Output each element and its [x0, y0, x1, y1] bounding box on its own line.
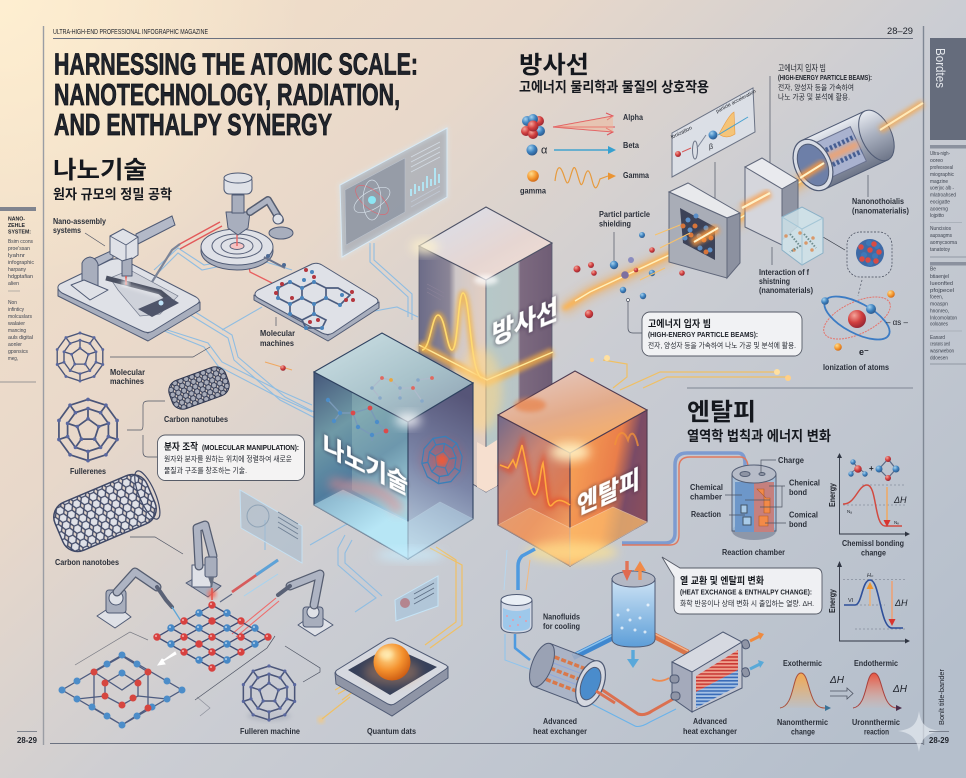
chart: enthalpy energy: VI [848, 598, 854, 604]
label: nanofluids [543, 612, 580, 631]
label: particle shielding [599, 209, 650, 228]
glow lines around cubes [590, 355, 791, 390]
callout: high-energy particle beams [642, 312, 802, 356]
label: particle shielding: Particl particle [599, 209, 650, 219]
chart: enthalpy energy [828, 561, 910, 644]
left sidebar: NANO- [8, 216, 25, 222]
arrow: exothermic to endothermic [829, 675, 853, 699]
right sidebar: aooerng [930, 206, 948, 212]
right sidebar: miographic [930, 172, 954, 178]
icon: left robot arm [97, 572, 181, 628]
chart: enthalpy energy: Energy [828, 589, 837, 613]
chart: endothermic curve: ΔH [892, 684, 908, 695]
icon: carbon nanotube small [166, 364, 232, 412]
heading: enthalpy [687, 399, 831, 444]
icon: heat vessel [612, 561, 655, 668]
right sidebar: ooloanes [930, 322, 948, 328]
right sidebar [929, 38, 966, 364]
icon: scanning microscope [201, 173, 293, 270]
icon: nanomaterial cube [782, 207, 823, 265]
callout: heat exchange [662, 557, 822, 614]
cube: radiation [411, 207, 558, 492]
label: fullerenes: Fullerenes [70, 466, 106, 476]
label: chemical bonding change: Chemissl bonding [842, 538, 904, 548]
icon: advanced heat exchanger radiator [652, 632, 764, 712]
right sidebar: aupsagms [930, 233, 952, 239]
label: heat exchanger left: heat exchanger [533, 726, 588, 736]
left sidebar: SYSTEM: [8, 230, 31, 236]
icon: nanofluid beaker [501, 594, 532, 633]
chart: chemical bonding energy: Nₑ [894, 520, 899, 525]
label: nanofluids: Nanofluids [543, 612, 580, 622]
right sidebar: Inlcomolaton [930, 316, 957, 322]
panel: ionization diagram: Ionization [670, 125, 693, 141]
icon: radiation alpha nucleus [521, 114, 545, 139]
label: chemical bonding change [842, 538, 904, 558]
right sidebar: Ultra-nigh- [930, 151, 950, 157]
icon: fullerene [59, 399, 117, 461]
icon: reaction chamber [725, 460, 786, 540]
icon: quantum dot device [335, 638, 448, 716]
label: carbon nanotubes: Carbon nanotubes [164, 414, 228, 424]
label: interaction: Interaction of f [759, 267, 809, 277]
label: gamma: Gamma [623, 170, 649, 180]
icon: molecular machine plate [254, 263, 379, 341]
title: HARNESSING THE ATOMIC SCALE: [54, 46, 418, 82]
heading: radiation: 방사선 [519, 52, 589, 79]
label: heat exchanger right: heat exchanger [683, 726, 738, 736]
lattice: assembled structure [62, 655, 182, 725]
icon: fullerene small [57, 333, 103, 381]
right sidebar: uoerjoc alb - [930, 186, 954, 192]
label: beam note [778, 63, 872, 102]
icon: gamma particle: gamma [520, 186, 546, 196]
icon: ionization atom: – αs – [886, 318, 909, 327]
heading: nanotechnology: 원자 규모의 정밀 공학 [53, 187, 173, 202]
lattice: molecular manipulation [156, 604, 268, 668]
right sidebar: moaspn [930, 302, 948, 308]
icon: top robot arm [186, 525, 221, 600]
arrow: alpha [553, 113, 615, 135]
label: nano-assembly systems: Nano-assembly [53, 216, 106, 226]
icon: atom nucleus zoom [847, 232, 892, 277]
heading: enthalpy: 엔탈피 [687, 399, 756, 426]
labels: reaction chamber: Comical [789, 510, 818, 520]
labels: reaction chamber: Reaction chamber [722, 547, 786, 557]
right sidebar: lojpitto [930, 213, 944, 219]
icon: ionization atom: e⁻ [859, 347, 869, 357]
icon: carbon nanotube large [49, 468, 165, 556]
right sidebar: hnonreo, [930, 308, 949, 314]
labels: reaction chamber: chamber [690, 492, 723, 502]
chart: chemical bonding energy: ΔH [893, 495, 907, 505]
magazine header: ULTRA-HIGH-END PROFESSIONAL INFOGRAPHIC MAGAZINE [53, 27, 208, 36]
callout: molecular manipulation: (MOLECULAR MANIPULATION): [202, 443, 299, 452]
label: heat exchanger right [683, 716, 738, 736]
right sidebar: Eanard [930, 335, 945, 341]
left sidebar: Bsim ccons [8, 239, 33, 245]
right sidebar: mlatroahsed [930, 192, 956, 198]
callout: high-energy particle beams: (HIGH-ENERGY PARTICLE BEAMS): [648, 330, 758, 339]
label: alpha: Alpha [623, 112, 643, 122]
icon: particle accelerator cylinder [785, 105, 901, 197]
chart: exothermic curve [777, 658, 831, 736]
cube: nanotechnology [314, 333, 473, 561]
left sidebar: Non [8, 300, 17, 306]
left sidebar: auls digital [8, 335, 33, 341]
left sidebar: ZEHLE [8, 223, 25, 229]
label: beta: Beta [623, 140, 639, 150]
callout: heat exchange: (HEAT EXCHANGE & ENTHALPY CHANGE): [680, 588, 812, 596]
label: heat exchanger left: Advanced [543, 716, 577, 726]
left sidebar: alien [8, 281, 19, 287]
left sidebar: harpany [8, 267, 26, 273]
chart: chemical bonding energy: Energy [828, 483, 837, 507]
labels: reaction chamber: bond [789, 487, 807, 497]
label: beam note: 전자, 양성자 등을 가속하여 [778, 82, 854, 92]
callout: molecular manipulation [158, 435, 304, 480]
heading: enthalpy: 열역학 법칙과 에너지 변화 [687, 428, 831, 444]
icon: right robot arm [232, 574, 333, 637]
chart: chemical bonding energy [828, 453, 910, 536]
pipes: cooling loop [504, 549, 688, 726]
cube: nanotechnology: 나노기술 [323, 431, 408, 500]
labels: reaction chamber: Chemical [690, 482, 723, 492]
pipe: cube to reaction chamber [622, 453, 748, 545]
cube: enthalpy [498, 371, 647, 566]
right sidebar: magzine [930, 179, 948, 185]
left sidebar: infinticy [8, 307, 24, 313]
right sidebar: tanatotoy [930, 247, 950, 253]
left sidebar [0, 207, 36, 382]
chart: exothermic curve: change [791, 726, 815, 736]
heading: radiation: 고에너지 물리학과 물질의 상호작용 [519, 79, 709, 95]
right sidebar: ooreo [930, 158, 943, 164]
particles scatter [574, 225, 690, 318]
chart: exothermic curve: Nanomthermic [777, 717, 828, 727]
label: fulleren machine: Fulleren machine [240, 726, 300, 736]
right sidebar: foeen, [930, 294, 943, 300]
footer page numbers: 28-29 [17, 735, 37, 745]
icon: second shielding block [742, 158, 798, 245]
energy beam [563, 167, 825, 310]
right sidebar: pfojpecel [930, 288, 954, 294]
label: molecular machines upper: Molecular [260, 328, 296, 338]
label: particle shielding: shielding [599, 218, 631, 228]
heading: radiation [519, 52, 709, 95]
right sidebar: cearans aed [930, 342, 950, 348]
energy beam exit [880, 103, 923, 130]
left sidebar: meg, [8, 356, 18, 362]
labels: reaction chamber: Chenical [789, 478, 820, 488]
labels: reaction chamber: Reaction [691, 509, 721, 519]
label: molecular machines lower: Molecular [110, 367, 146, 377]
arrow: exothermic to endothermic: ΔH [829, 675, 845, 686]
labels: reaction chamber [690, 455, 820, 557]
right sidebar: wasnwebon [929, 348, 954, 354]
callout: heat exchange: 열 교환 및 엔탈피 변화 [680, 575, 764, 587]
icon: advanced heat exchanger cylinder [524, 639, 615, 711]
icon: holographic display panel [340, 128, 447, 257]
footer vertical label: Bonlt title-bander [937, 668, 946, 725]
left sidebar: infographic [8, 260, 34, 266]
right sidebar: aomycsoma [930, 240, 958, 246]
label: beam note: 고에너지 입자 빔 [778, 63, 826, 73]
title: NANOTECHNOLOGY, RADIATION, [54, 77, 400, 112]
icon: nano-assembly machine [58, 216, 222, 341]
right sidebar: btiaenjel [930, 274, 949, 280]
label: carbon nanotobes: Carbon nanotobes [55, 557, 119, 567]
sparkle mark [898, 711, 941, 752]
label: heat exchanger right: Advanced [693, 716, 727, 726]
icon: gamma particle [520, 170, 546, 196]
icon: fullerene machine [242, 666, 296, 721]
callout: molecular manipulation: 원자와 분자를 원하는 위치에 정렬하여 새로운 [164, 454, 292, 464]
footer page numbers: 28-29 [929, 735, 949, 745]
labels: reaction chamber: Charge [778, 455, 804, 465]
icon: nano tools [220, 560, 278, 602]
magazine header [53, 26, 913, 37]
molecule on left face [328, 400, 386, 441]
thin leader lines [75, 76, 868, 716]
callout: molecular manipulation: 분자 조작 [164, 441, 198, 453]
label: interaction: (nanomaterials) [759, 285, 813, 295]
right sidebar: Bordtes [933, 48, 948, 88]
label: nanonothoialis: (nanomaterialis) [852, 206, 909, 216]
label: chemical bonding change: change [861, 548, 886, 558]
heading: nanotechnology [53, 157, 173, 202]
magazine header: 28–29 [887, 26, 913, 37]
arrow: beta [554, 146, 616, 154]
panel: ionization diagram: particle acceleration [715, 88, 757, 115]
cube: enthalpy: 엔탈피 [577, 464, 640, 521]
left sidebar: molcuslars [8, 314, 32, 320]
icon: small holographic panel [240, 490, 302, 563]
chart: chemical bonding energy: + [869, 464, 874, 473]
icon: ionization atom [818, 288, 909, 357]
label: beam note: 나노 가공 및 분석에 활용. [778, 92, 850, 102]
left sidebar: aonler [8, 342, 22, 348]
right sidebar: Nuncisios [930, 226, 951, 232]
label: molecular machines lower: machines [110, 376, 144, 386]
label: interaction [759, 267, 813, 295]
title [54, 46, 418, 142]
left sidebar: gpsnsics [8, 349, 28, 355]
chart: enthalpy energy: ΔH [894, 598, 908, 608]
chart: endothermic curve [852, 658, 908, 736]
left sidebar: walaier [7, 321, 25, 327]
label: nanonothoialis: Nanonothoialis [852, 196, 904, 206]
callout: high-energy particle beams: 전자, 양성자 등을 가속하여 나노 가공 및 분석에 활용. [648, 340, 796, 350]
left sidebar: proe'ssan [8, 246, 30, 252]
right sidebar: profeosoeal [930, 165, 953, 171]
label: nanonothoialis [852, 196, 909, 216]
icon: shielding block [669, 183, 740, 278]
right sidebar: ddoesen [930, 356, 948, 362]
callout: high-energy particle beams: 고에너지 입자 빔 [648, 318, 711, 330]
label: molecular machines upper [260, 328, 296, 348]
left sidebar: hdgptafian [8, 274, 33, 280]
chart: endothermic curve: Uronnthermic [852, 717, 900, 727]
chart: endothermic curve: Endothermic [854, 658, 898, 668]
molecule on top face [372, 378, 432, 401]
label: molecular machines upper: machines [260, 338, 294, 348]
left sidebar: lyahnr [8, 253, 25, 259]
labels: reaction chamber: bond [789, 519, 807, 529]
label: heat exchanger left [533, 716, 588, 736]
chart: exothermic curve: Exothermic [783, 658, 822, 668]
arrow: gamma wave [555, 168, 616, 188]
callout: heat exchange: 화학 반응이나 상태 변화 시 출입하는 열량. ΔH. [680, 598, 814, 608]
title: AND ENTHALPY SYNERGY [54, 107, 332, 142]
chart: chemical bonding energy: Nₐ [847, 509, 852, 514]
right sidebar: Iueonfted [930, 281, 953, 287]
arrow: lattice output [158, 652, 176, 665]
label: nano-assembly systems: systems [53, 225, 81, 235]
chart: enthalpy energy: Hₙ [867, 573, 874, 579]
panel: ionization diagram: β [709, 144, 713, 151]
callout: molecular manipulation: 물질과 구조를 창조하는 기술. [164, 465, 247, 475]
label: ionization of atoms: Ionization of atoms [823, 362, 889, 372]
footer page numbers [17, 732, 949, 745]
label: nano-assembly systems [53, 216, 106, 235]
right sidebar: Be [930, 266, 936, 272]
right sidebar: eocigatte [930, 200, 950, 206]
icon: beta particle: α [541, 144, 548, 156]
label: molecular machines lower [110, 367, 146, 386]
circuit lines: nano section [154, 243, 462, 723]
left sidebar: mancing [8, 328, 26, 334]
panel: ionization diagram [670, 88, 757, 177]
label: interaction: shistning [759, 276, 790, 286]
label: beam note: (HIGH-ENERGY PARTICLE BEAMS): [778, 75, 872, 82]
chart: endothermic curve: reaction [864, 726, 889, 736]
label: quantum dats: Quantum dats [367, 726, 416, 736]
heading: nanotechnology: 나노기술 [53, 157, 147, 184]
cube: radiation: 방사선 [492, 294, 558, 351]
label: nanofluids: for cooling [543, 621, 580, 631]
icon: small floating panel [395, 576, 438, 621]
icon: beta particle [526, 144, 548, 156]
